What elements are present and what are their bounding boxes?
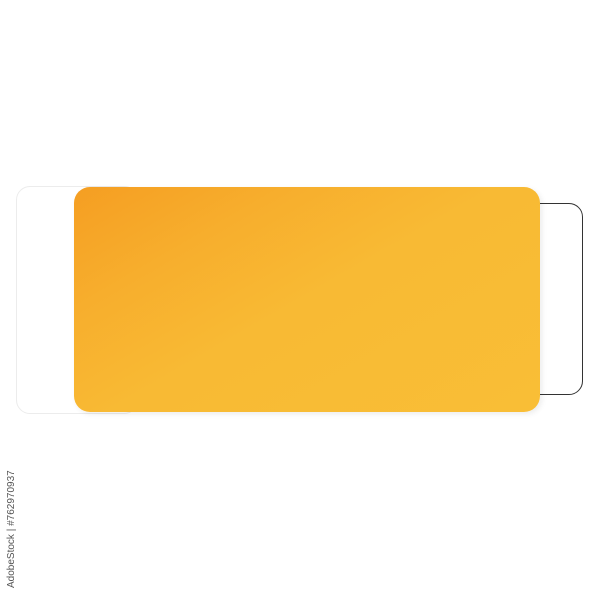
white back card left <box>16 186 138 414</box>
watermark id text: AdobeStock | #762970937 <box>6 470 17 588</box>
outlined back card right <box>440 203 583 395</box>
orange main card <box>74 187 540 412</box>
